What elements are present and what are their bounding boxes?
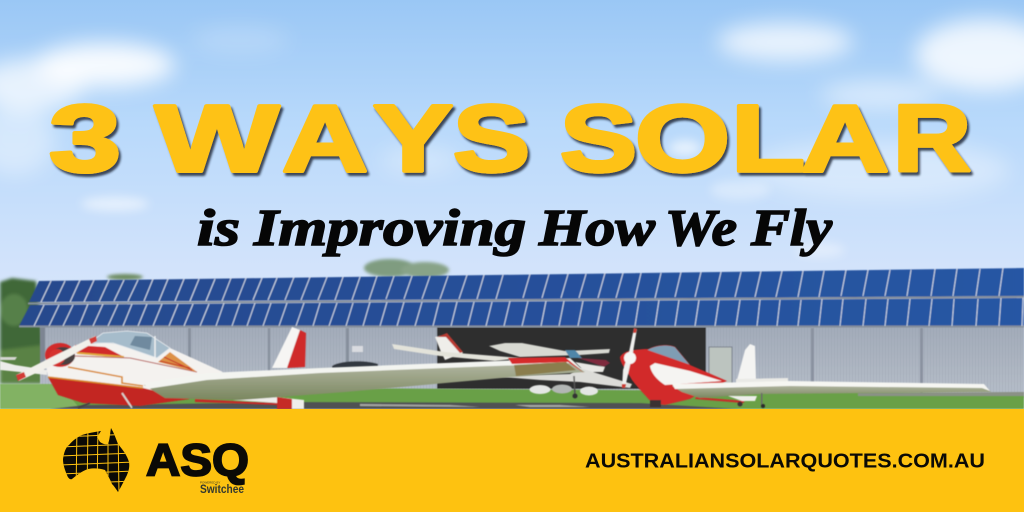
subtitle: How: [538, 200, 655, 257]
cowling: [45, 343, 75, 367]
title: W: [155, 86, 279, 192]
side door: [709, 347, 732, 388]
spinner: [49, 349, 65, 365]
solar panel array: [19, 268, 1024, 326]
panel rails: [19, 297, 1024, 326]
parked plane wing: [392, 344, 520, 361]
propeller: [622, 328, 637, 388]
subtitle: [197, 200, 833, 257]
subtitle: Improving: [253, 200, 526, 257]
far plane stripe: [578, 358, 610, 367]
website url: AUSTRALIANSOLARQUOTES.COM.AU: [585, 450, 985, 472]
logo sub-brand: Switchee: [200, 482, 244, 496]
white side panel: [650, 363, 722, 385]
background planes inside hangar: [392, 333, 632, 398]
icon: Australia solar grid logo: [63, 428, 130, 492]
propeller: [16, 336, 97, 381]
tailplane: [695, 397, 745, 403]
vertical tail: [272, 327, 300, 368]
tail strip: [195, 399, 277, 405]
hangar building: [40, 326, 1024, 398]
title: A: [282, 86, 368, 192]
fuselage: [620, 349, 727, 405]
orange stripes: [48, 367, 143, 388]
footer band: [0, 409, 1024, 512]
small cloud: [81, 140, 845, 257]
subtitle: We: [665, 200, 737, 257]
title: L: [731, 86, 805, 192]
main wing: [144, 360, 585, 400]
fuselage lower red: [48, 377, 190, 406]
parked plane tail: [435, 334, 463, 360]
hangar door opening: [437, 327, 706, 389]
main wing: [672, 384, 991, 398]
subtitle: Fly: [750, 200, 833, 257]
top panel row: [29, 268, 1024, 302]
tail fin: [737, 344, 756, 380]
top row separators: [41, 268, 1003, 302]
far plane window: [565, 350, 582, 358]
logo wordmark ASQ: ASQ: [146, 434, 249, 486]
clouds: [0, 19, 1024, 200]
top red panel: [75, 345, 124, 357]
far plane upper wing: [489, 343, 610, 357]
plane belly: [490, 368, 632, 388]
title: R: [893, 86, 971, 192]
stripe badge: [158, 352, 197, 372]
title: O: [635, 86, 730, 192]
red wing tip: [508, 357, 584, 373]
title: Y: [373, 86, 453, 192]
logo sub-brand: POWERED BY: [200, 480, 220, 484]
canopy: [647, 345, 690, 365]
wing tip underside: [514, 362, 576, 376]
subtitle: is: [197, 200, 240, 257]
title: S: [560, 86, 637, 192]
wheel pods: [530, 384, 598, 396]
title: 3: [49, 86, 121, 192]
right red glider: [620, 328, 991, 408]
far wing: [0, 361, 47, 375]
title: S: [453, 86, 530, 192]
title: A: [801, 86, 889, 192]
bottom panel row: [19, 298, 1024, 326]
fuselage white: [46, 343, 223, 395]
left red glider: [0, 327, 585, 409]
canopy: [89, 331, 170, 358]
grass and apron: [0, 384, 1024, 409]
gear: [78, 403, 90, 408]
bottom row separators: [34, 298, 1023, 326]
title: [49, 86, 971, 192]
gear: [650, 400, 661, 407]
tree line: [0, 259, 449, 384]
